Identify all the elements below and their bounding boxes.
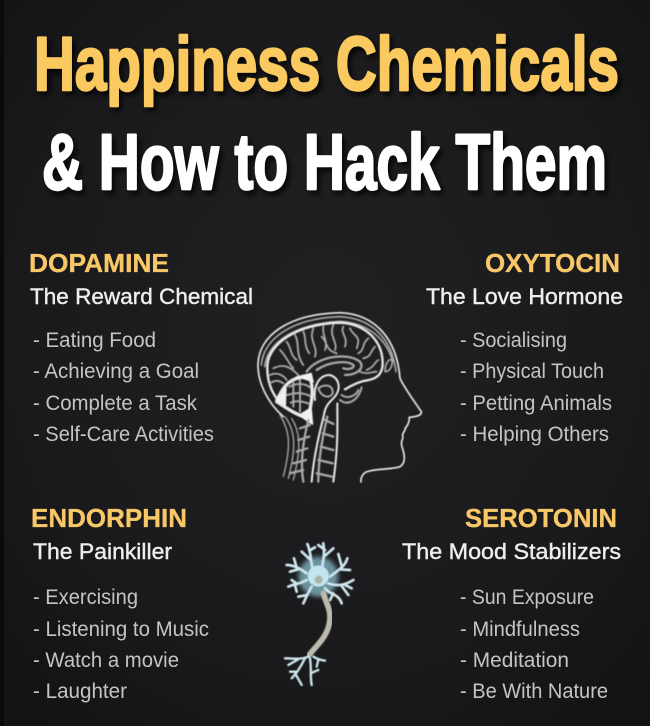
oxytocin list: - Socialising bbox=[460, 329, 567, 352]
oxytocin heading: OXYTOCIN bbox=[485, 250, 620, 278]
endorphin list: - Watch a movie bbox=[33, 649, 179, 672]
dopamine list bbox=[33, 329, 214, 446]
endorphin list bbox=[33, 586, 209, 703]
frontal sinus bbox=[385, 360, 392, 372]
axon terminal branches bbox=[285, 657, 325, 685]
corpus callosum bbox=[307, 356, 361, 375]
dopamine subtitle: The Reward Chemical bbox=[30, 284, 253, 309]
axon bbox=[309, 593, 330, 655]
cell body bbox=[308, 565, 329, 587]
bright junction bbox=[275, 373, 314, 425]
oxytocin list: - Petting Animals bbox=[460, 392, 612, 415]
icon: neuron bbox=[285, 543, 353, 685]
dopamine heading: DOPAMINE bbox=[29, 250, 169, 278]
title bbox=[34, 22, 619, 206]
nucleus bbox=[315, 576, 323, 584]
dopamine list: - Complete a Task bbox=[33, 392, 197, 415]
brain outline bbox=[267, 323, 383, 406]
left dark edge bbox=[0, 0, 4, 726]
endorphin list: - Laughter bbox=[33, 680, 127, 703]
oxytocin list: - Physical Touch bbox=[460, 360, 604, 383]
dendrites bbox=[287, 543, 353, 603]
head outline and profile bbox=[258, 313, 421, 482]
panel: serotonin bbox=[402, 505, 621, 703]
skull inner lines bbox=[261, 317, 396, 372]
dopamine list: - Eating Food bbox=[33, 329, 156, 352]
serotonin list: - Meditation bbox=[460, 649, 569, 672]
oxytocin subtitle: The Love Hormone bbox=[426, 284, 623, 309]
neck lines bbox=[280, 415, 299, 480]
cerebellum folia bbox=[287, 380, 310, 412]
brainstem bbox=[312, 375, 339, 482]
serotonin heading: SEROTONIN bbox=[465, 505, 617, 533]
brain folds bbox=[270, 325, 378, 383]
panel: endorphin bbox=[31, 505, 209, 703]
serotonin list: - Mindfulness bbox=[460, 618, 580, 641]
dopamine list: - Achieving a Goal bbox=[33, 360, 199, 383]
cerebellum boundary bbox=[277, 377, 312, 418]
icon: brain and head profile bbox=[258, 313, 421, 482]
endorphin subtitle: The Painkiller bbox=[33, 539, 172, 564]
dopamine list: - Self-Care Activities bbox=[33, 423, 214, 446]
serotonin list bbox=[460, 586, 608, 703]
midbrain detail bbox=[318, 386, 362, 403]
serotonin subtitle: The Mood Stabilizers bbox=[402, 539, 621, 564]
serotonin list: - Sun Exposure bbox=[460, 586, 594, 609]
panel: dopamine bbox=[29, 250, 253, 446]
neuron glow bbox=[298, 557, 338, 597]
endorphin heading: ENDORPHIN bbox=[31, 505, 187, 533]
oxytocin list: - Helping Others bbox=[460, 423, 609, 446]
endorphin list: - Exercising bbox=[33, 586, 138, 609]
spine vertebrae bbox=[290, 417, 333, 482]
endorphin list: - Listening to Music bbox=[33, 618, 209, 641]
oxytocin list bbox=[460, 329, 612, 446]
serotonin list: - Be With Nature bbox=[460, 680, 608, 703]
panel: oxytocin bbox=[426, 250, 623, 446]
